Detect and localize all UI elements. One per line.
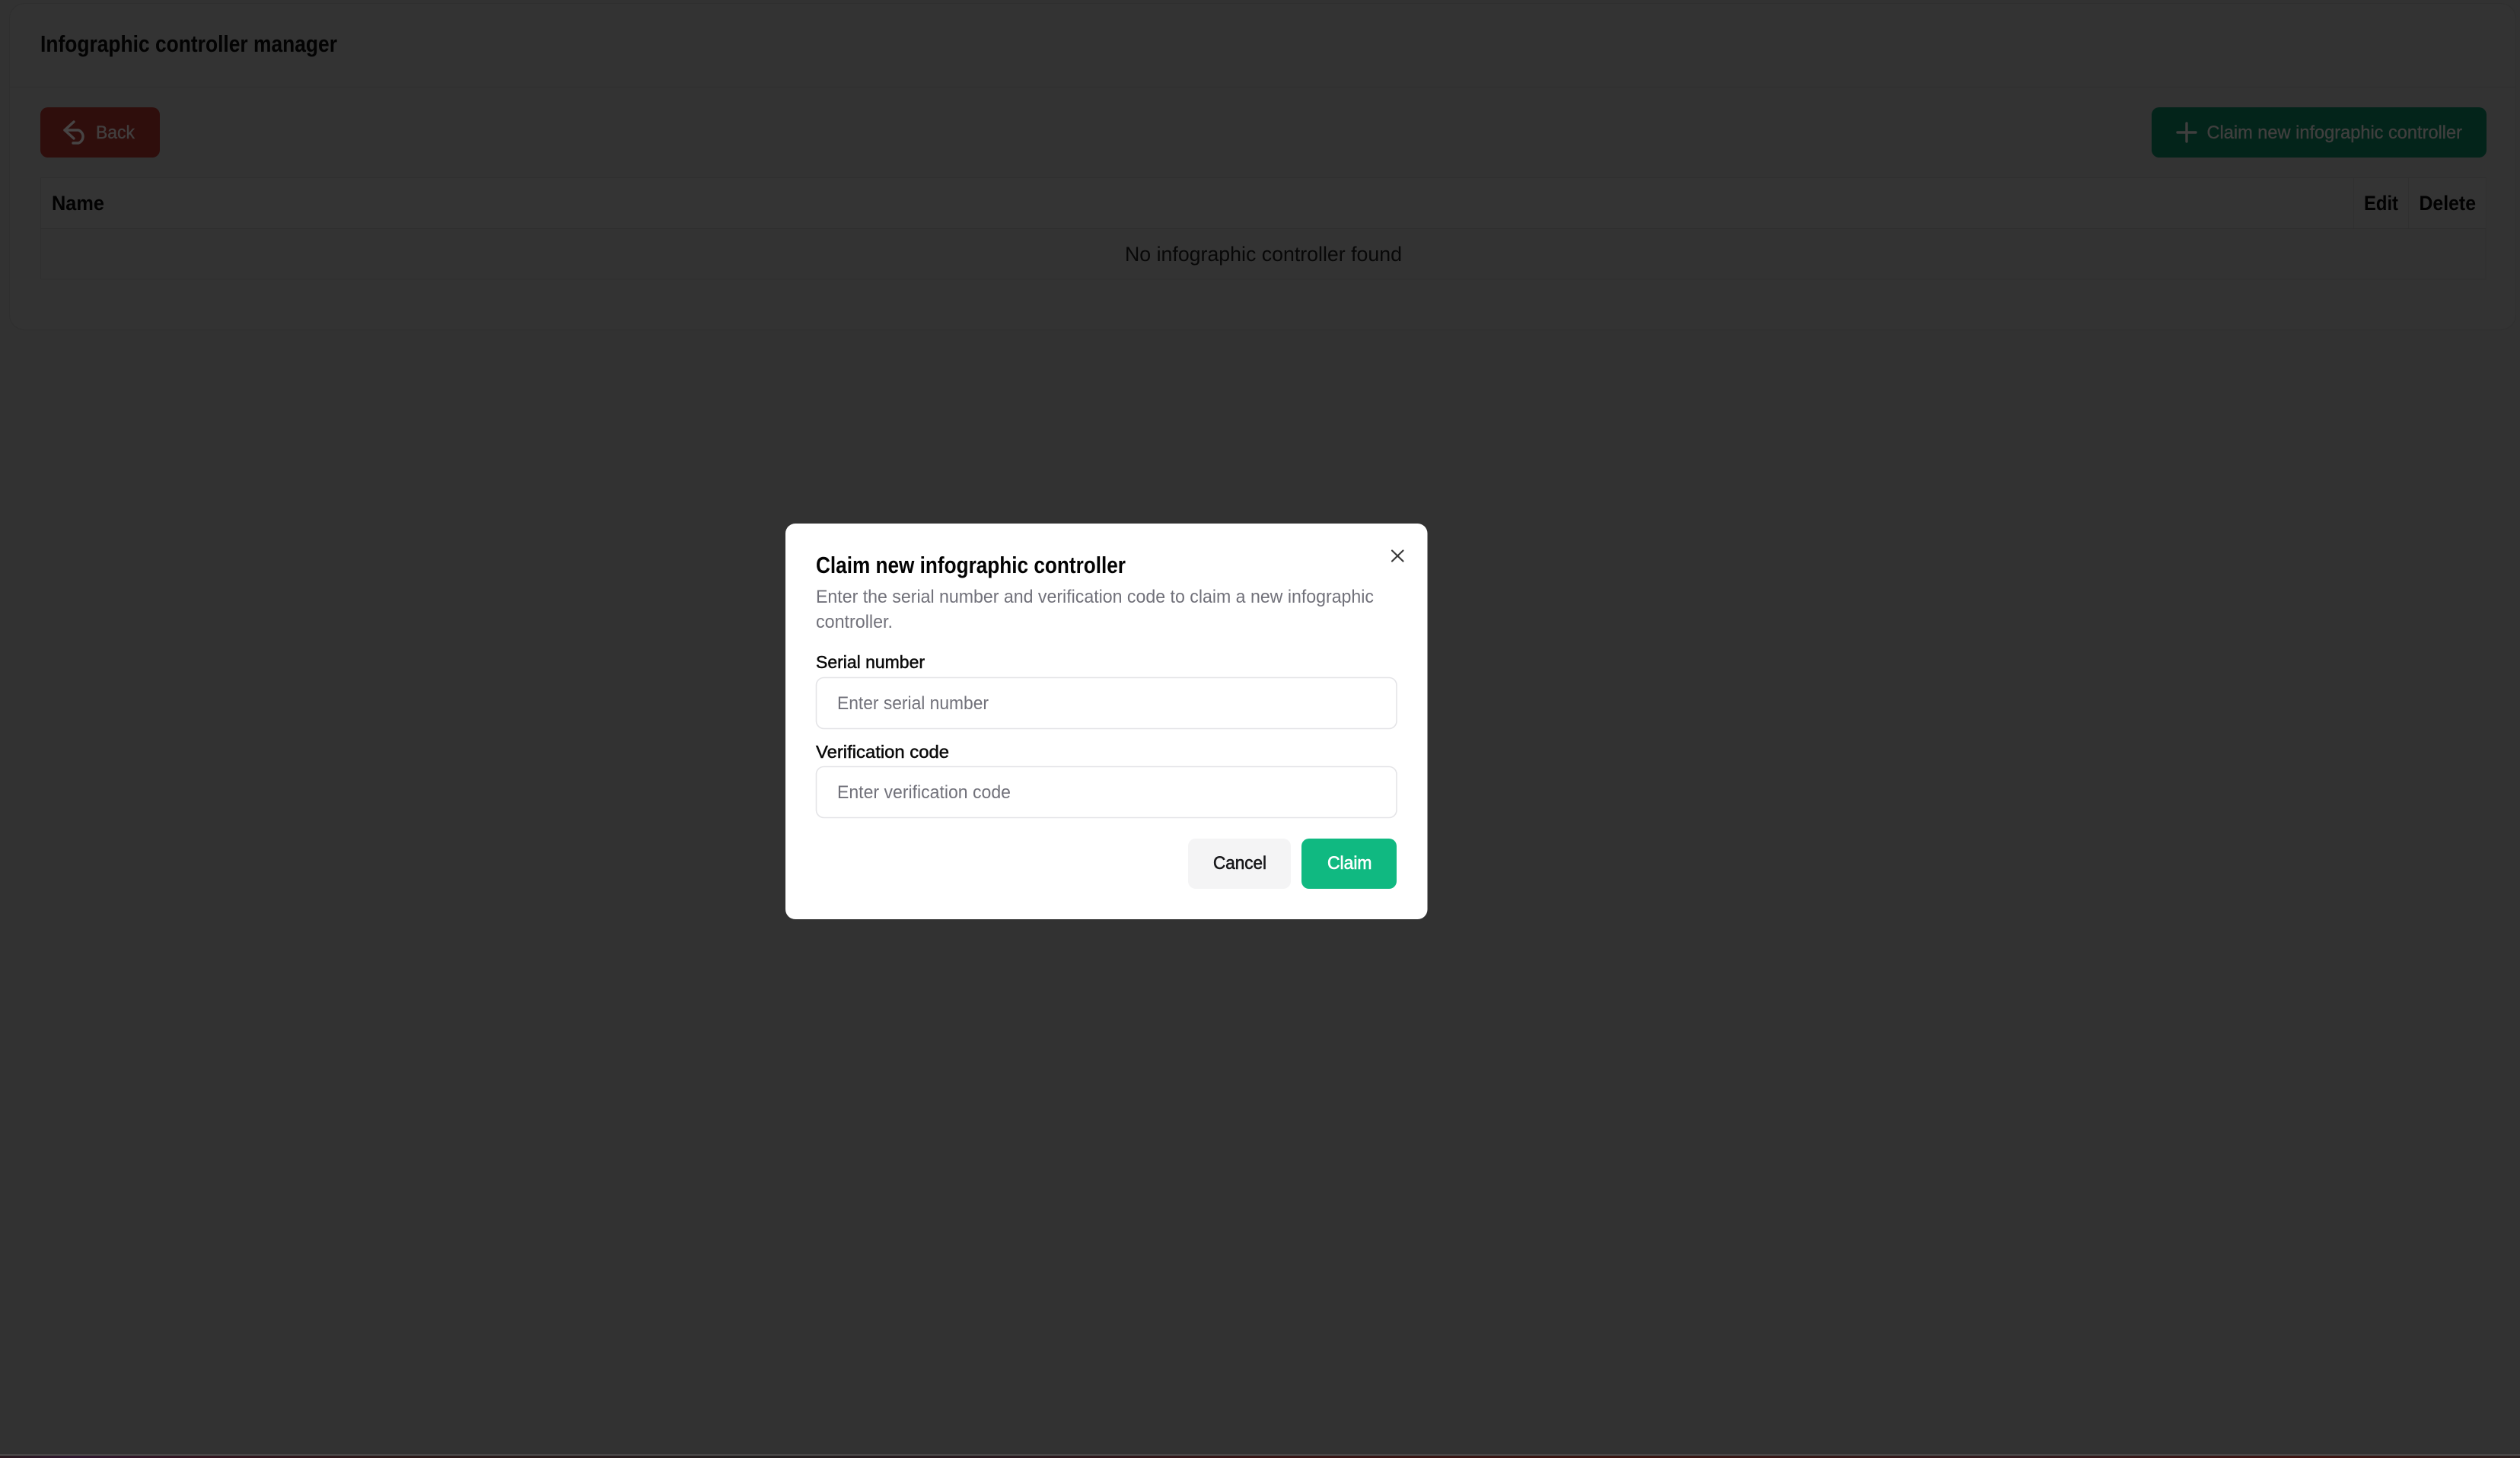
button: claim [1301,839,1397,889]
label: serial number: Serial number [816,652,925,672]
column header: name: Name [52,192,104,215]
empty table message: No infographic controller found [1125,243,1402,266]
modal description: controller. [816,612,893,632]
button: cancel [1188,839,1291,889]
claim new controller button [2152,107,2487,158]
panel: controller manager card [9,3,2516,330]
page heading: Infographic controller manager [40,30,337,57]
back button: Back [96,123,135,143]
modal description: Enter the serial number and verification code to claim a new infographic [816,587,1374,607]
back button [40,107,160,158]
table: controllers [40,178,2486,279]
input: verification code: Enter verification code [837,782,1011,803]
bottom colour strip [0,1454,2520,1458]
input: verification code [816,767,1397,817]
label: verification code: Verification code [816,742,949,762]
column header: delete: Delete [2419,192,2476,215]
claim new controller button: Claim new infographic controller [2207,123,2462,143]
modal heading: Claim new infographic controller [816,552,1126,578]
input: serial number: Enter serial number [837,693,989,714]
icon: close [1392,551,1403,562]
button: claim: Claim [1327,853,1372,874]
panel: claim modal [785,524,1428,919]
button: cancel: Cancel [1213,853,1266,874]
modal description [816,587,1374,632]
icon: back arrow [65,122,83,143]
column header: edit: Edit [2364,192,2398,215]
input: serial number [816,677,1397,729]
icon: plus [2178,123,2196,142]
